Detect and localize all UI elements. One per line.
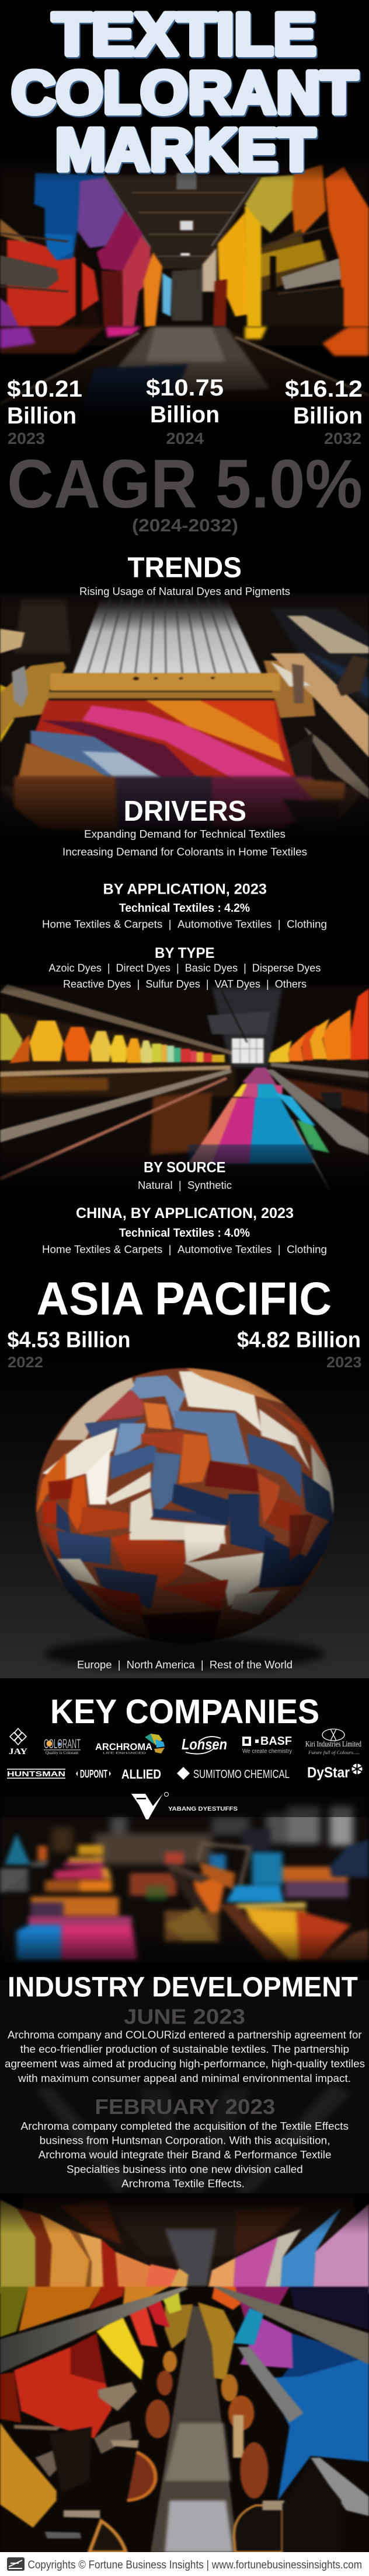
logo: BASF <box>242 1735 292 1755</box>
development: June 2023: with maximum consumer appeal and minimal environmental impact. <box>18 2072 351 2084</box>
drivers list: Expanding Demand for Technical Textiles <box>84 828 286 840</box>
development: June 2023: JUNE 2023 <box>124 2004 245 2029</box>
photo: woven sphere of coloured fabric strips <box>0 1367 369 1678</box>
footer bar <box>0 2552 369 2576</box>
photo: dark machinery backdrop behind industry development <box>0 1980 369 2196</box>
logo: DuPont: DUPONT <box>80 1769 107 1780</box>
logo: Colorant: COLORANT <box>44 1737 81 1751</box>
stat 2024: Billion <box>150 402 220 428</box>
company logos <box>7 1728 362 1819</box>
stat 2032: Billion <box>293 403 363 429</box>
development: February 2023: Archroma Textile Effects. <box>121 2177 245 2190</box>
logo: BASF: We create chemistry <box>242 1748 292 1755</box>
segment: by source: Natural | Synthetic <box>138 1180 232 1191</box>
drivers list: Increasing Demand for Colorants in Home Textiles <box>62 846 307 858</box>
segment: by source: BY SOURCE <box>144 1160 225 1176</box>
title face layer: COLORANT <box>12 60 357 126</box>
stat 2023: Billion <box>7 403 76 429</box>
stat 2023 <box>7 376 82 447</box>
logo: DyStar: DyStar <box>307 1765 350 1781</box>
segment: china by application <box>42 1205 327 1255</box>
development: February 2023: Specialties business into one new division called <box>67 2163 303 2175</box>
segment: china by application: Technical Textiles : 4.0% <box>119 1227 250 1240</box>
logo: Archroma <box>95 1734 165 1755</box>
development: February 2023: business from Huntsman Corporation. With this acquisition, <box>40 2134 330 2147</box>
segment: china by application: Home Textiles & Carpets | Automotive Textiles | Clothing <box>42 1244 327 1255</box>
logo: Archroma: ARCHROMA <box>95 1741 152 1752</box>
development: June 2023: agreement was aimed at producing high-performance, high-quality textiles <box>5 2057 365 2070</box>
photo: textile workshop with workers and looms <box>0 1773 369 1980</box>
trends text: Rising Usage of Natural Dyes and Pigments <box>79 586 290 597</box>
CAGR period: (2024-2032) <box>132 515 238 536</box>
stat 2023: $10.21 <box>7 376 82 402</box>
asia pacific stats <box>7 1328 362 1371</box>
stat 2032 <box>285 376 363 447</box>
title <box>12 1 358 184</box>
development: February 2023: FEBRUARY 2023 <box>95 2095 275 2119</box>
stat 2032: $16.12 <box>285 376 363 402</box>
title face layer: TEXTILE <box>53 1 316 68</box>
logo: DuPont <box>76 1769 111 1780</box>
logo: Archroma: LIFE ENHANCED <box>103 1751 147 1755</box>
logo: Kiri Industries: Future full of Colours..... <box>308 1750 360 1755</box>
logo: Colorant <box>44 1737 81 1755</box>
stat 2024 <box>146 375 224 447</box>
logo: Yabang Dyestuffs <box>131 1792 238 1819</box>
logo: Sumitomo Chemical: SUMITOMO CHEMICAL <box>193 1768 290 1781</box>
segment: by application: Home Textiles & Carpets | Automotive Textiles | Clothing <box>42 918 327 930</box>
logo: Huntsman: HUNTSMAN <box>7 1770 65 1778</box>
stat 2022: $4.53 Billion <box>7 1328 131 1352</box>
development: February 2023: Archroma company completed the acquisition of the Textile Effects <box>21 2120 349 2132</box>
trends heading: TRENDS <box>127 552 242 583</box>
segment: by type: Reactive Dyes | Sulfur Dyes | VAT Dyes | Others <box>63 978 307 990</box>
asia pacific heading: ASIA PACIFIC <box>36 1273 332 1324</box>
development: February 2023 <box>21 2095 349 2190</box>
segment: by type <box>48 945 321 990</box>
logo: Jay <box>9 1728 27 1756</box>
photo: spinning mill with rows of thread cones <box>0 974 369 1353</box>
logo: Yabang Dyestuffs: YABANG DYESTUFFS <box>168 1805 238 1812</box>
logo: Lonsen: Lonsen <box>182 1735 227 1753</box>
logo: BASF: BASF <box>260 1735 292 1748</box>
logo: Sumitomo Chemical <box>177 1767 290 1781</box>
stat 2024: $10.75 <box>146 375 224 401</box>
development: February 2023: Archroma would integrate their Brand & Performance Textile <box>39 2148 331 2161</box>
development: June 2023: Archroma company and COLOURizd entered a partnership agreement for <box>8 2029 362 2041</box>
other regions: Europe | North America | Rest of the World <box>77 1659 293 1671</box>
stat 2023: 2023 <box>326 1353 362 1371</box>
stat 2023: $4.82 Billion <box>237 1328 361 1352</box>
logo: Allied: ALLIED <box>121 1767 161 1782</box>
logo: Jay: JAY <box>9 1747 27 1756</box>
segment: by application <box>42 881 327 930</box>
stat 2022: 2022 <box>8 1353 43 1371</box>
development: June 2023 <box>5 2004 365 2084</box>
title shadow layer: COLORANT <box>13 61 358 127</box>
title shadow layer: MARKET <box>56 118 316 184</box>
logo: Huntsman <box>7 1769 65 1779</box>
title face layer <box>12 1 357 183</box>
photo: loom with colourful woven cloth <box>0 575 369 983</box>
stat 2022 <box>7 1328 131 1371</box>
development: June 2023: the eco-friendlier production of sustainable textiles. The partnership <box>20 2043 349 2055</box>
industry development heading: INDUSTRY DEVELOPMENT <box>8 1972 358 2003</box>
segment: by application: Technical Textiles : 4.2% <box>119 902 250 915</box>
title shadow layer: TEXTILE <box>54 2 318 69</box>
segment: by source <box>138 1160 232 1191</box>
segment: by application: BY APPLICATION, 2023 <box>103 881 267 897</box>
market size stats <box>7 375 363 447</box>
stat 2023 <box>237 1328 362 1371</box>
segment: by type: BY TYPE <box>155 945 215 961</box>
drivers list <box>62 828 307 858</box>
stat 2024: 2024 <box>166 429 204 447</box>
photo: dye factory aisle with hanging fabrics <box>0 146 369 575</box>
segment: china by application: CHINA, BY APPLICATION, 2023 <box>76 1205 294 1222</box>
segment: by type: Azoic Dyes | Direct Dyes | Basic Dyes | Disperse Dyes <box>48 963 321 974</box>
stat 2032: 2032 <box>324 429 361 447</box>
stat 2023: 2023 <box>8 429 45 447</box>
key companies heading: KEY COMPANIES <box>50 1693 319 1731</box>
logo: Colorant: Quality is Colorant <box>46 1750 79 1755</box>
icon: Fortune Business Insights logo <box>7 2557 25 2571</box>
photo: weaving machines with vivid yarn rows <box>0 2193 369 2553</box>
drivers heading: DRIVERS <box>124 796 246 827</box>
logo: Kiri Industries <box>305 1729 361 1755</box>
title shadow layer <box>13 2 358 184</box>
title face layer: MARKET <box>55 117 315 183</box>
